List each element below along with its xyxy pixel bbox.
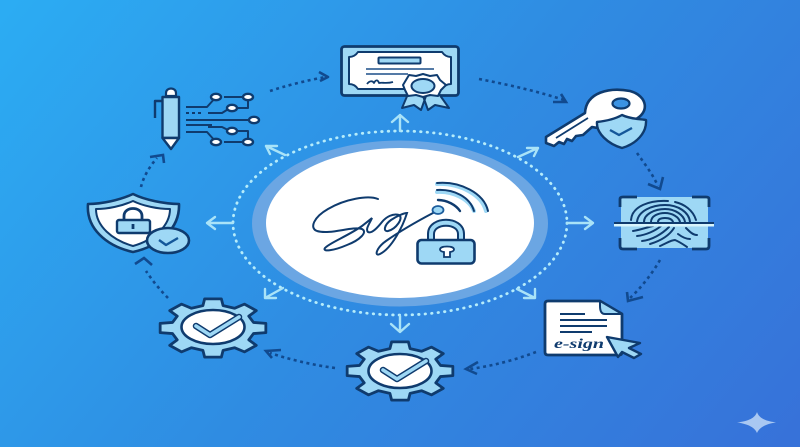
fingerprint ridges [631, 201, 697, 247]
arrow lower left [265, 288, 283, 298]
cursor arrow [607, 337, 641, 358]
signature logo [313, 183, 488, 255]
scan line [614, 224, 714, 226]
rosette seal [403, 74, 446, 97]
central dotted orbit [233, 131, 567, 315]
icon: sparkle watermark [737, 412, 776, 433]
e-sign label: e-sign [554, 337, 604, 352]
central badge ring [252, 140, 548, 306]
signature scribble [313, 197, 433, 255]
arrow key to fingerprint [637, 153, 663, 189]
arrow fingerprint to e-sign [627, 260, 660, 301]
arrow left [207, 217, 233, 229]
arrow pen to certificate [270, 72, 328, 91]
arrow left gear to shield [135, 258, 168, 298]
icon: shield with lock and check [88, 194, 189, 253]
icon: digital pen with circuit [155, 88, 259, 149]
arrow e-sign to lower gear [466, 352, 536, 374]
arrow lower right [517, 289, 535, 298]
icon: certificate [342, 46, 458, 110]
icon: key with shield [546, 90, 646, 148]
arrow down [391, 316, 409, 332]
signal dot [432, 206, 444, 214]
arrow upper left [266, 146, 285, 155]
circuit traces [186, 97, 250, 142]
arrow lower gear to left gear [266, 350, 335, 368]
radial arrows [207, 115, 593, 332]
arrow right [567, 217, 593, 229]
icon: left gear with check [160, 299, 266, 357]
icon: lower gear with check [347, 342, 453, 400]
arrow shield to pen [141, 155, 164, 187]
pen body [155, 88, 179, 149]
rosette ribbons [402, 94, 449, 110]
central white disc [266, 148, 534, 298]
circular dashed arrows [135, 72, 663, 374]
arrow up [392, 115, 408, 131]
signal arcs [437, 183, 488, 211]
padlock icon [418, 223, 474, 264]
icon: fingerprint scanner [614, 197, 714, 249]
arrow certificate to key [479, 79, 566, 102]
circuit nodes [211, 94, 259, 145]
icon: e-sign document [545, 301, 641, 358]
arrow upper right [518, 148, 538, 157]
